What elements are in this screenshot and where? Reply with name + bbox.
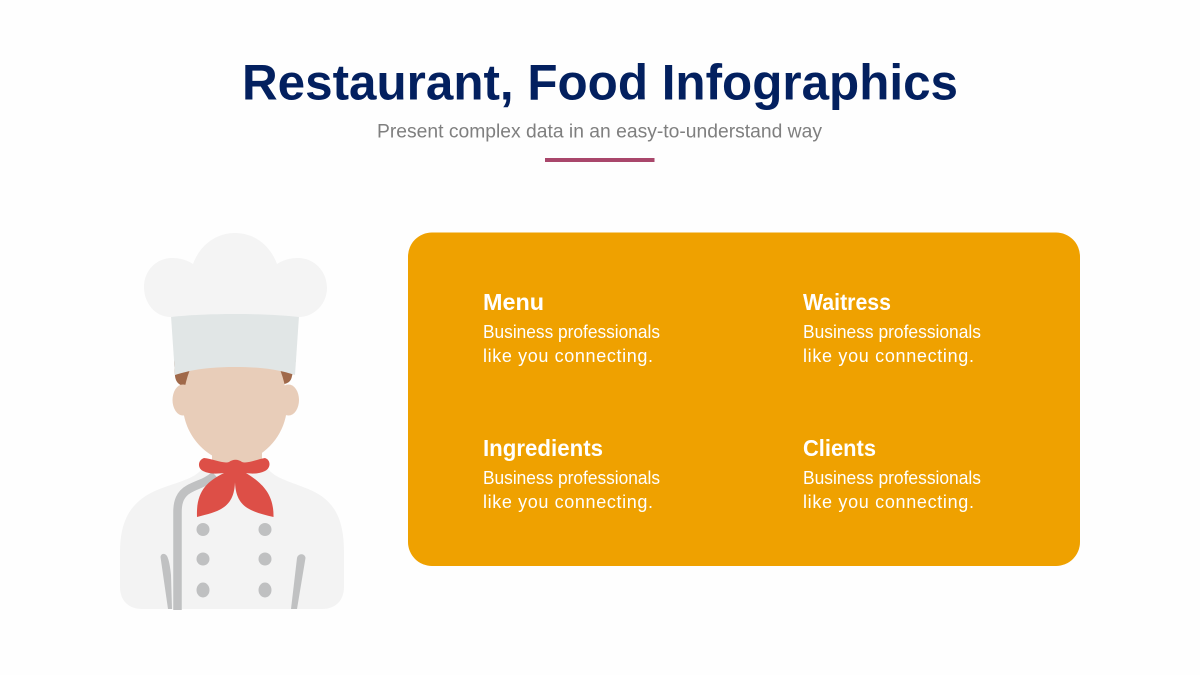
item: waitress	[803, 289, 981, 366]
hair	[174, 360, 200, 387]
item: menu: Business professionals	[483, 322, 660, 342]
item: ingredients: Ingredients	[483, 435, 603, 461]
panel background	[408, 232, 1080, 566]
title: Restaurant, Food Infographics	[242, 54, 958, 110]
jacket placket trim	[178, 475, 215, 610]
face	[183, 360, 287, 462]
item: menu: Menu	[483, 289, 544, 315]
left sleeve seam	[160, 554, 172, 609]
item: waitress: Business professionals	[803, 322, 981, 342]
item: waitress: Waitress	[803, 289, 891, 315]
jacket buttons	[196, 523, 272, 598]
neck	[212, 440, 262, 466]
item: clients: Business professionals	[803, 468, 981, 488]
item: clients: Clients	[803, 435, 876, 461]
item: ingredients: Business professionals	[483, 468, 660, 488]
red neckerchief	[197, 458, 274, 517]
item: menu: like you connecting.	[483, 346, 653, 366]
right sleeve seam	[291, 554, 306, 609]
chef jacket	[120, 467, 344, 609]
panel: info card	[408, 232, 1080, 566]
item: clients	[803, 435, 981, 512]
item: ingredients	[483, 435, 660, 512]
accent divider	[545, 158, 654, 162]
item: ingredients: like you connecting.	[483, 492, 653, 512]
ears	[172, 384, 194, 416]
illustration: chef	[120, 233, 344, 610]
hat band	[171, 313, 299, 375]
subtitle: Present complex data in an easy-to-understand way	[377, 122, 822, 142]
item: waitress: like you connecting.	[803, 346, 974, 366]
item: clients: like you connecting.	[803, 492, 974, 512]
hat puff	[144, 233, 327, 317]
item: menu	[483, 289, 660, 366]
